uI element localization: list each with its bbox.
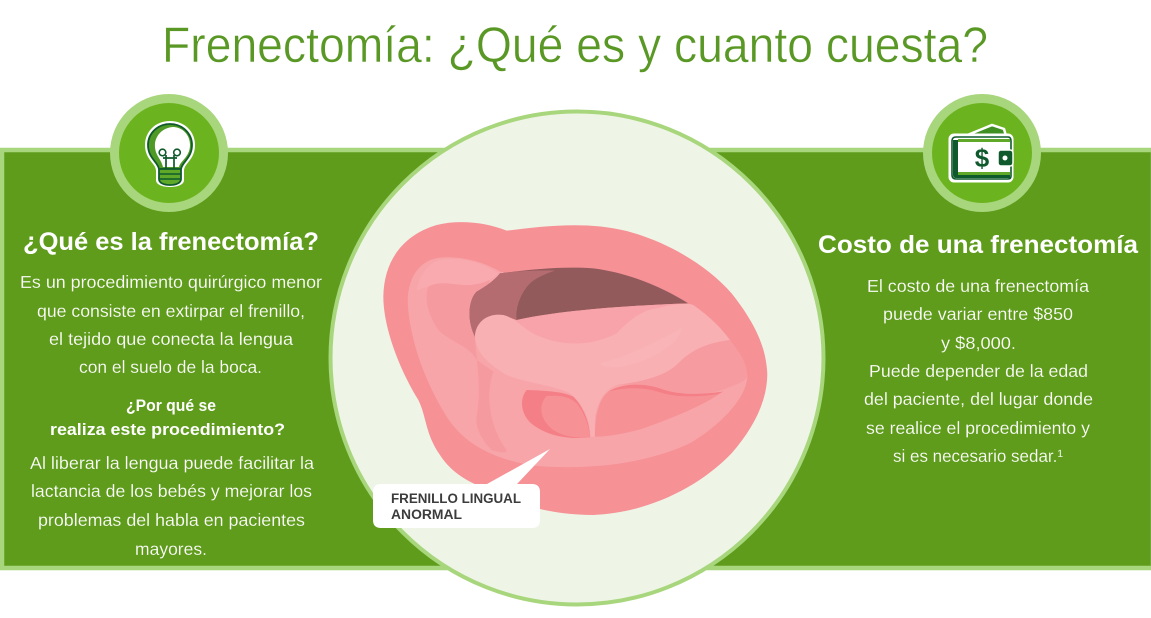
left sublingual pocket (522, 390, 590, 438)
callout: frenillo lingual anormal (373, 449, 550, 528)
panel: que es la frenectomia (20, 228, 322, 559)
illustration: mouth with tongue (383, 222, 767, 515)
text block: cost: y $8,000. (941, 333, 1016, 353)
text block: cost: si es necesario sedar.¹ (893, 446, 1063, 466)
inner mouth floor (408, 257, 747, 467)
text block: cost: del paciente, del lugar donde (864, 389, 1093, 409)
text block: reasons: mayores. (135, 539, 207, 559)
text block: cost: El costo de una frenectomía (867, 276, 1089, 296)
text block: definition: que consiste en extirpar el frenillo, (37, 301, 305, 321)
icon: wallet with dollar (923, 94, 1041, 212)
text block: definition (20, 272, 322, 377)
heading: costo: Costo de una frenectomía (818, 231, 1139, 259)
callout: frenillo lingual anormal: FRENILLO LINGUAL (391, 491, 521, 506)
subheading: por que (50, 396, 285, 439)
upper light band (417, 259, 498, 290)
tongue highlight (600, 328, 682, 368)
icon: wallet with dollar: $ (975, 143, 990, 173)
heading: que es: ¿Qué es la frenectomía? (23, 228, 319, 256)
pocket inner (541, 396, 590, 438)
text block: cost: puede variar entre $850 (883, 304, 1073, 324)
sublingual fold (617, 340, 747, 395)
tongue body (475, 304, 730, 437)
text block: definition: con el suelo de la boca. (79, 357, 262, 377)
icon: light bulb (110, 94, 228, 212)
panel: costo (818, 231, 1139, 466)
callout: frenillo lingual anormal: ANORMAL (391, 507, 462, 522)
subheading: por que: realiza este procedimiento? (50, 420, 285, 439)
mouth cavity (470, 268, 688, 337)
title: Frenectomía: ¿Qué es y cuanto cuesta? (162, 17, 988, 73)
text block: definition: el tejido que conecta la lengua (49, 329, 293, 349)
cavity light side (470, 270, 555, 337)
left cheek shade (427, 280, 507, 452)
subheading: por que: ¿Por qué se (126, 396, 216, 415)
text block: cost: Puede depender de la edad (869, 361, 1088, 381)
text block: cost: se realice el procedimiento y (866, 418, 1090, 438)
text block: definition: Es un procedimiento quirúrgico menor (20, 272, 322, 292)
text block: reasons (30, 453, 314, 559)
text block: reasons: lactancia de los bebés y mejorar los (31, 481, 312, 501)
outer lips (383, 222, 767, 515)
panel: green background (2, 150, 1151, 568)
tongue back (517, 303, 693, 353)
text block: reasons: Al liberar la lengua puede facilitar la (30, 453, 314, 473)
text block: reasons: problemas del habla en pacientes (38, 510, 305, 530)
frenulum edge (608, 385, 723, 396)
right sublingual pocket (595, 387, 720, 437)
central circle (330, 112, 824, 604)
text block: cost (864, 276, 1093, 466)
